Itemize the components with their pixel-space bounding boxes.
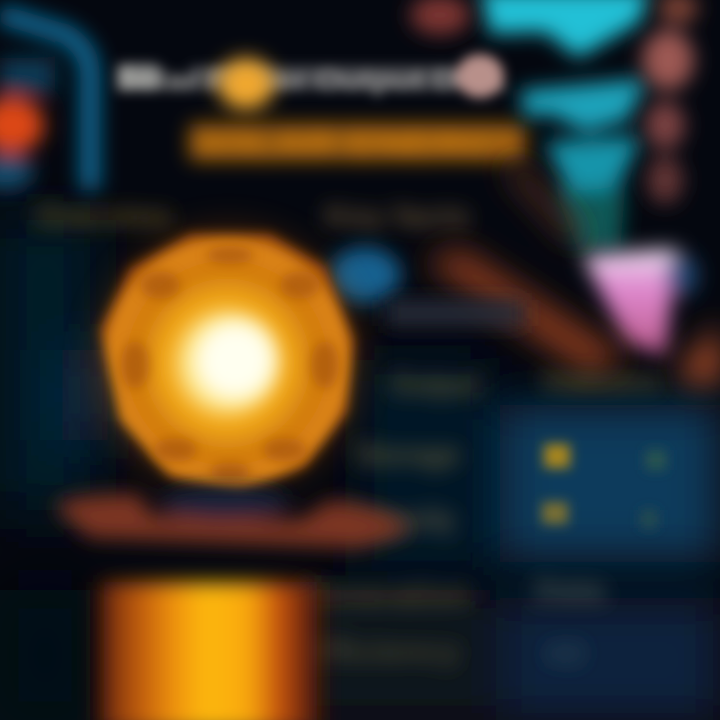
- table value markers: [542, 444, 666, 528]
- subheadings: Overview: [36, 200, 172, 233]
- text block rows: 42: [545, 638, 585, 668]
- icon: glowing sun: [93, 225, 363, 495]
- icon: small sun on heading: [218, 58, 274, 110]
- text block rows: Generation: [300, 576, 470, 612]
- text block rows: Output: [390, 366, 480, 402]
- text block rows: Storage: [355, 436, 460, 472]
- icon: blue box: [329, 247, 401, 303]
- title: SOLAR ENERGY: [188, 124, 526, 166]
- text block rows: Capacity: [345, 501, 455, 537]
- top heading row: Solar Power Output Data: [115, 64, 505, 97]
- text block rows: Values: [540, 366, 660, 396]
- reflection: [90, 582, 330, 720]
- arrow: diagonal red beam: [425, 165, 720, 384]
- icon: top left neon frame: [0, 14, 90, 190]
- sun base platform: [55, 487, 410, 548]
- text block rows: [300, 300, 660, 669]
- text block rows: Efficiency: [300, 633, 460, 669]
- mottled darker ring: [121, 246, 339, 482]
- panel: lower right dark blue table: [300, 360, 720, 720]
- panel: left dark column: [0, 220, 110, 720]
- subheadings: Key facts: [325, 200, 470, 233]
- subheadings: [36, 200, 470, 233]
- top heading row: [115, 54, 505, 98]
- icon: cyan arrows and chevrons: [480, 0, 650, 250]
- icon: pink chain column: [410, 0, 698, 204]
- text block rows: Data: [535, 575, 605, 606]
- icon: pink crystal: [582, 248, 698, 356]
